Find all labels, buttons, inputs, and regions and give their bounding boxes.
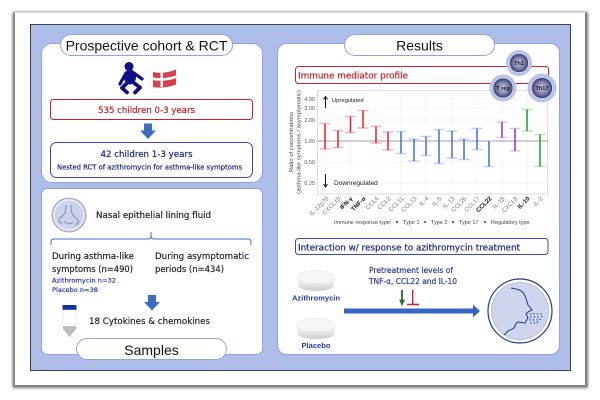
- icon: nose: [52, 198, 86, 232]
- x axis labels: CCL13: [400, 195, 419, 214]
- x axis labels: CXCL8: [501, 195, 520, 214]
- box: interaction with response: Interaction w/ response to azithromycin treatment: [298, 244, 521, 254]
- text: pretreatment levels: TNF-α, CCL22 and IL-10: [368, 277, 457, 286]
- icon: Th17 cell: Th17: [536, 86, 548, 92]
- annotation: upregulated: Upregulated: [332, 98, 364, 104]
- heading: samples: Samples: [124, 342, 179, 358]
- icon: baby: [120, 62, 142, 92]
- x axis labels: CCL11: [387, 195, 406, 214]
- text: pretreatment levels: Pretreatment levels of: [369, 266, 453, 275]
- y axis title: Ratio of concentrations: [289, 112, 295, 172]
- text: cytokines and chemokines: 18 Cytokines & chemokines: [89, 317, 210, 327]
- x axis labels: CCL2: [376, 195, 393, 211]
- icon: Th1 cell: Th1: [514, 61, 524, 67]
- text: during asthma-like symptoms: During asthma-like: [52, 252, 134, 262]
- x axis labels: IL-12p70: [308, 195, 331, 217]
- x axis labels: IL-2: [532, 195, 545, 208]
- y axis tick labels: 1.00: [304, 139, 315, 145]
- legend: Type 2: [431, 220, 448, 226]
- icon: T reg cell: [490, 74, 516, 102]
- legend: Type 17: [459, 220, 479, 226]
- text: during asthma-like symptoms: Azithromycin n=32: [52, 276, 116, 284]
- icon: patient profile: [488, 279, 552, 343]
- x axis labels: CXCL10: [321, 195, 343, 217]
- text: during asymptomatic periods: periods (n=434): [155, 265, 224, 275]
- icon: Th17 cell: [528, 74, 556, 102]
- x axis labels: IFN-γ: [339, 195, 355, 211]
- blue background panel: [30, 24, 570, 370]
- box: 535 children: [50, 100, 252, 120]
- box: immune mediator profile: Immune mediator profile: [298, 72, 408, 82]
- label: placebo: Placebo: [301, 341, 331, 350]
- icon: azithromycin pill: [298, 270, 334, 291]
- arrow: cohort to RCT: [140, 124, 156, 139]
- box: interaction with response: [296, 238, 548, 254]
- annotation: downregulated: Downregulated: [334, 180, 378, 187]
- y axis tick labels: 0.50: [304, 160, 315, 166]
- box: 42 children: Nested RCT of azithromycin for asthma-like symptoms: [57, 164, 242, 172]
- text: during asymptomatic periods: During asymptomatic: [155, 252, 249, 262]
- y axis title: [289, 90, 302, 194]
- x axis labels: IL-5: [431, 195, 444, 208]
- x axis labels: CCL17: [463, 195, 482, 214]
- text: during asthma-like symptoms: [52, 252, 134, 294]
- annotation: downregulated: [324, 174, 378, 187]
- y axis tick labels: 2.00: [304, 118, 315, 124]
- error bars: regulatory type: [522, 110, 546, 166]
- x axis labels: IL-1β: [492, 195, 507, 210]
- text: during asymptomatic periods: [155, 252, 249, 275]
- box: 42 children: 42 children 1-3 years: [100, 150, 193, 160]
- y axis tick labels: 0.25: [304, 181, 315, 187]
- y axis tick labels: [304, 97, 315, 187]
- panel: results: [278, 34, 560, 354]
- box: 42 children: [50, 142, 252, 178]
- x axis labels: IL-10: [516, 195, 532, 210]
- arrow: samples to cytokines: [144, 295, 160, 310]
- icon: Danish flag: [153, 70, 176, 88]
- icon: Th1 cell: [506, 50, 532, 76]
- x axis labels: IL-13: [442, 195, 457, 210]
- error bars: type 1: [320, 110, 394, 150]
- text: nasal epithelial lining fluid: Nasal epithelial lining fluid: [96, 211, 211, 221]
- panel: prospective cohort and RCT: [42, 34, 262, 182]
- legend: Regulatory type: [491, 220, 530, 226]
- icon: green down arrow: [400, 290, 404, 304]
- x axis labels: IL-4: [418, 195, 431, 208]
- arrow: treatment to response: [344, 304, 480, 318]
- text: pretreatment levels: [368, 266, 457, 286]
- bracket: [51, 232, 251, 245]
- error bars: type 2: [396, 128, 494, 166]
- heading: results: [344, 34, 494, 56]
- icon: placebo pill: [297, 318, 335, 339]
- x axis labels: TNF-α: [350, 195, 368, 213]
- y axis title: (asthma-like symptoms / asymptomatic): [296, 90, 302, 194]
- box: immune mediator profile: [296, 66, 548, 84]
- legend: [334, 220, 530, 226]
- y axis tick labels: 3.00: [304, 106, 315, 112]
- error bars: type 17: [496, 122, 520, 151]
- icon: red inhibition mark: [407, 290, 419, 304]
- heading: prospective cohort and RCT: Prospective cohort & RCT: [66, 38, 228, 54]
- icon: sample tube: [62, 305, 76, 337]
- x axis labels: CCL22: [475, 195, 494, 214]
- label: azithromycin: Azithromycin: [292, 294, 340, 302]
- x axis labels: CCL4: [364, 195, 381, 211]
- panel: samples: [42, 188, 262, 360]
- text: during asthma-like symptoms: symptoms (n=490): [52, 265, 133, 275]
- icon: T reg cell: T reg: [496, 86, 510, 92]
- legend: Immune response type:: [334, 220, 392, 226]
- x axis labels: CCL26: [450, 195, 469, 214]
- text: during asthma-like symptoms: Placebo n=38: [52, 286, 98, 294]
- heading: results: Results: [396, 38, 443, 54]
- chart: ratio of concentrations: [289, 90, 548, 226]
- y axis tick labels: 4.00: [304, 97, 315, 103]
- x axis labels: [308, 195, 545, 217]
- box: 535 children: 535 children 0-3 years: [98, 106, 195, 116]
- annotation: upregulated: [324, 96, 364, 108]
- legend: Type 1: [403, 220, 420, 226]
- heading: samples: [76, 338, 226, 360]
